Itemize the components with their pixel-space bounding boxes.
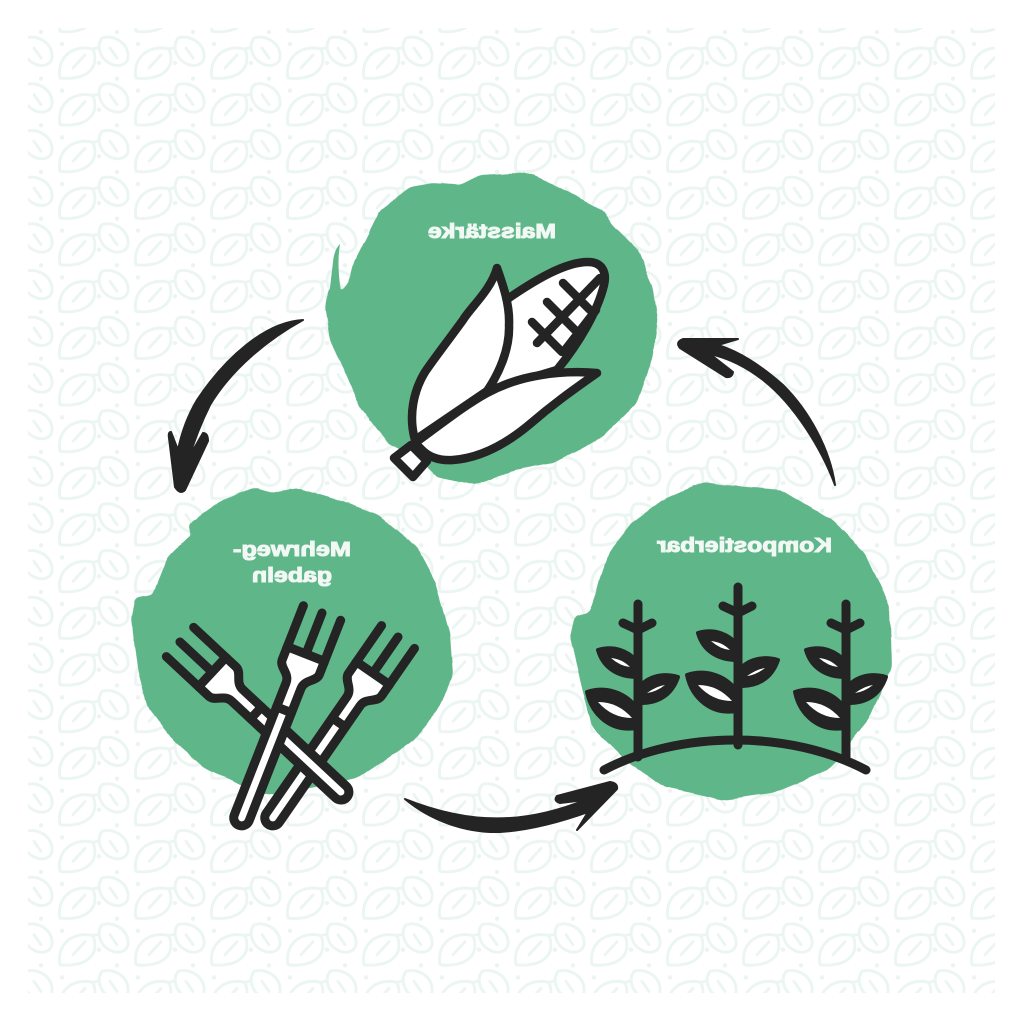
label: Mehrweg-gabeln (mirrored): Mehrweg- bbox=[233, 539, 351, 561]
plant: centre bbox=[687, 587, 778, 745]
fork: left bbox=[166, 627, 360, 812]
plant: left bbox=[587, 604, 678, 757]
label: Mehrweg-gabeln (mirrored) bbox=[233, 539, 351, 587]
icon: growing plants bbox=[587, 587, 886, 770]
icon: crossed forks bbox=[166, 606, 414, 836]
arrow: corn to forks bbox=[169, 320, 303, 492]
panel: Kompostierbar bbox=[570, 482, 892, 800]
icon: corn cob bbox=[394, 262, 605, 477]
panel: Maisstärke bbox=[325, 173, 658, 485]
arrow: forks to plants bbox=[405, 782, 617, 832]
label: Maisstärke (mirrored): Maisstärke bbox=[428, 221, 556, 243]
panel: Mehrweggabeln bbox=[131, 487, 453, 836]
label: Mehrweg-gabeln (mirrored): gabeln bbox=[252, 565, 332, 587]
label: Kompostierbar (mirrored): Kompostierbar bbox=[657, 535, 832, 557]
green brush blob: forks bbox=[131, 487, 453, 795]
green brush blob: plants bbox=[570, 482, 892, 800]
brush spike on corn blob bbox=[329, 244, 342, 296]
ground line bbox=[604, 740, 866, 770]
fork: middle bbox=[220, 606, 341, 833]
plant: right bbox=[795, 604, 886, 757]
arrow: plants to corn bbox=[678, 339, 835, 485]
fork: right bbox=[252, 626, 414, 836]
green brush blob: corn bbox=[325, 173, 658, 485]
